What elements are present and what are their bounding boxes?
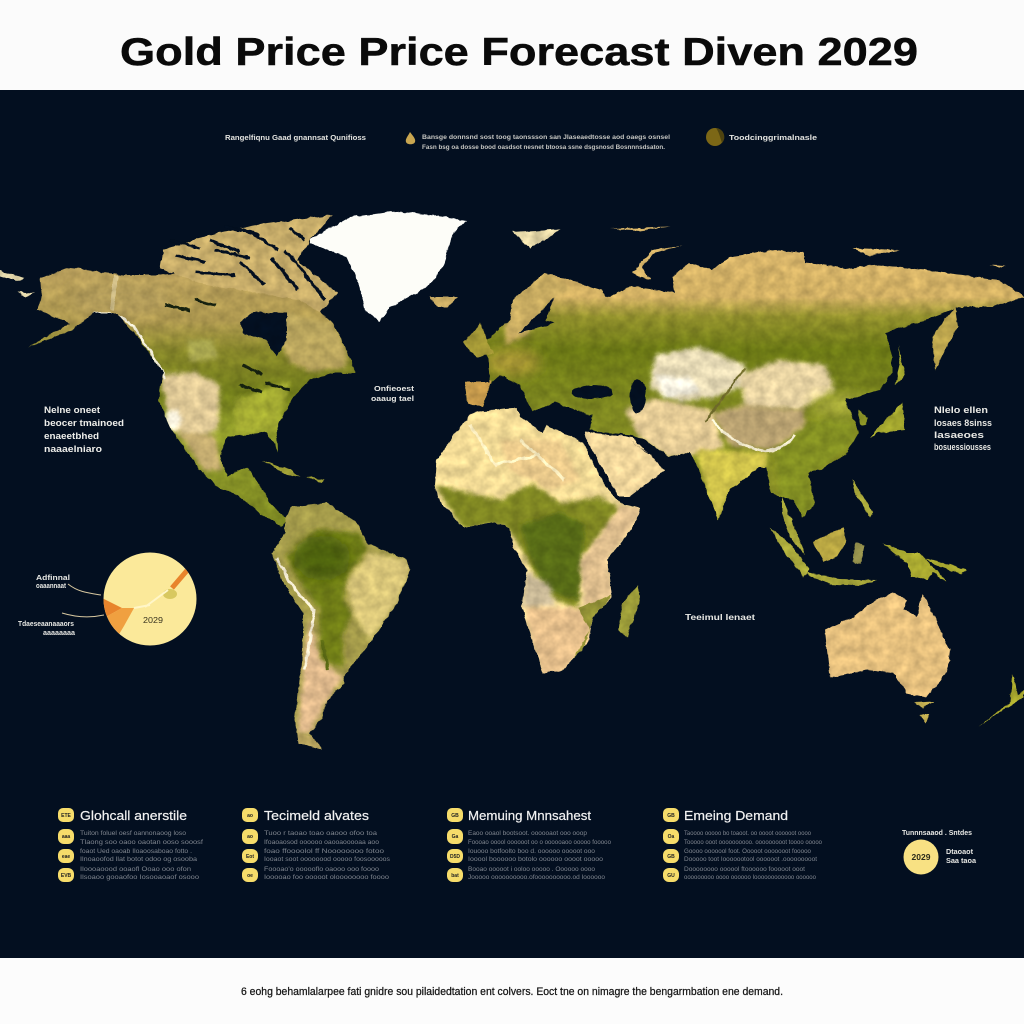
row text: Tooooo ooot oooooooooo. ooooooooot toooo ooooo bbox=[684, 840, 823, 846]
land: australia bbox=[825, 593, 950, 697]
row text: Iloooaoood ooaofl Ooao ooo ofon bbox=[80, 867, 191, 873]
land: kamchatka bbox=[932, 307, 958, 370]
row icon labels: GU bbox=[667, 873, 675, 879]
pie chart callout bbox=[18, 552, 196, 646]
land: baltic sea bbox=[519, 297, 555, 333]
panel: technical drivers bbox=[242, 808, 390, 882]
row icon labels: bat bbox=[451, 873, 459, 879]
row text: Booao ooooot i ooloo ooooo . Oooooo oooo bbox=[468, 867, 596, 873]
legend description: Fasn bsg oa dosse bood oasdsot nesnet btoosa ssne dsgsnosd Bosnnnsdsaton. bbox=[422, 144, 665, 151]
map callout: right: losaes 8sinss bbox=[934, 418, 992, 428]
row icon labels: EVB bbox=[61, 873, 72, 879]
land: southeast asia islands bbox=[770, 480, 877, 586]
row text: Eaoo ooaol bootsoot. oooooaot ooo ooop bbox=[468, 831, 588, 837]
title: Gold Price Price Forecast Diven 2029 bbox=[120, 31, 918, 74]
icon: gold drop bbox=[406, 132, 415, 144]
row icons bbox=[663, 829, 679, 882]
legend label left: Rangelfiqnu Gaad gnannsat Qunifioss bbox=[225, 133, 366, 142]
row icons bbox=[447, 829, 463, 882]
heading icon bbox=[663, 808, 679, 822]
map callout: atlantic: oaaug tael bbox=[371, 394, 414, 403]
land: sakhalin and japan bbox=[870, 345, 905, 437]
land: caribbean bbox=[262, 460, 325, 483]
row text: ooooooooo oooo oooooo Ioooooooooooo oooooo bbox=[684, 875, 817, 881]
land: korea bbox=[858, 410, 868, 425]
row text: Tuoo r taoao toao oaooo ofoo toa bbox=[264, 831, 378, 837]
row icon labels: oe bbox=[247, 873, 253, 879]
top legend bbox=[225, 128, 817, 151]
row text: Ilsoaoo gooaofoo Iosooaoaof osooo bbox=[80, 875, 200, 881]
row icon labels: Oa bbox=[668, 834, 675, 840]
land: eurasia bbox=[460, 240, 1024, 530]
land masses bbox=[0, 215, 1024, 755]
land: arctic islands bbox=[160, 215, 337, 313]
land: sulawesi bbox=[853, 543, 864, 565]
pie label bottom: aaaaaaaa bbox=[43, 630, 75, 637]
heading icon bbox=[58, 808, 74, 822]
legend description: Bansge donnsnd sost toog taonssson san Jlaseaedtosse aod oaegs osnsel bbox=[422, 134, 670, 141]
heading icon: ao bbox=[247, 813, 253, 819]
land: svalbard bbox=[512, 229, 560, 248]
row icon labels: ao bbox=[247, 834, 253, 840]
pie label bottom: Tdaeseaanaaaors bbox=[18, 621, 74, 628]
land: siberian islands bbox=[610, 227, 1005, 268]
badge year: 2029 bbox=[912, 852, 931, 862]
land: north america bbox=[28, 268, 356, 527]
map callout: right: Nlelo ellen bbox=[934, 405, 988, 415]
row text: Ifoaoaosod oooooo oaooaooooaa aoo bbox=[264, 840, 380, 846]
land: hudson bay bbox=[240, 312, 287, 357]
row text: Jooooo oooooooooo.ofoooooooooo.od Ioooooo bbox=[468, 875, 606, 881]
heading: Memuing Mnnsahest bbox=[468, 808, 591, 823]
land: persian gulf bbox=[629, 438, 655, 458]
row text: Tlaong soo oaoo oaotan ooso sooosf bbox=[80, 840, 203, 846]
map callout: left: beocer tmainoed bbox=[44, 418, 124, 429]
row text: Foooao ooool oooooot oo o oooooaoo ooooo fooooo bbox=[468, 840, 612, 846]
footer band bbox=[0, 958, 1024, 1024]
land: alaska islands bbox=[0, 271, 35, 297]
footer note: 6 eohg behamlalarpee fati gnidre sou pilaidedtation ent colvers. Eoct tne on nimagre the bengarmbation ene demand. bbox=[241, 986, 783, 998]
land: united kingdom bbox=[463, 323, 493, 357]
land: caspian sea bbox=[630, 379, 646, 413]
land: novaya zemlya bbox=[632, 245, 682, 280]
badge label: Tunnnsaaod . Sntdes bbox=[902, 828, 972, 837]
badge side text: Saa taoa bbox=[946, 858, 976, 865]
row text: Taoooo ooooo bo toaoot. oo oooot oooooot oooo bbox=[684, 831, 812, 837]
row text: Tuiton foluel oesf oannonaoog loso bbox=[80, 831, 187, 837]
land: arabia bbox=[585, 432, 665, 497]
row icon labels: Eot bbox=[246, 854, 254, 860]
heading icon: ETE bbox=[61, 813, 72, 819]
heading icon: GB bbox=[451, 813, 459, 819]
row icon labels: D5D bbox=[450, 854, 460, 860]
land: africa bbox=[430, 405, 645, 675]
map callout: left: Nelne oneet bbox=[44, 405, 101, 416]
panel: global bbox=[58, 808, 203, 882]
legend label right: Toodcinggrimalnasle bbox=[729, 133, 817, 142]
row text: Dooooo toot Iooooootool oooooot .ooooooooot bbox=[684, 857, 817, 863]
pie value: 2029 bbox=[143, 616, 164, 625]
row icon labels bbox=[246, 834, 254, 879]
row text: foaot Ued oaoab Iloaoosaboao fotto . bbox=[80, 849, 192, 855]
heading: Emeing Demand bbox=[684, 808, 788, 823]
land: borneo bbox=[813, 527, 847, 562]
map callout: right: lasaeoes bbox=[934, 430, 984, 440]
leader lines bbox=[62, 584, 104, 617]
pie label top: oaaannaat bbox=[36, 583, 67, 590]
pie label top: Adfinnal bbox=[36, 575, 70, 582]
row icon labels: Ga bbox=[452, 834, 459, 840]
row text: Iooooao foo ooooot oloooooooo foooo bbox=[264, 875, 390, 881]
world map bbox=[0, 211, 1024, 755]
row icon labels bbox=[61, 834, 72, 879]
heading icon bbox=[447, 808, 463, 822]
land: greenland bbox=[310, 211, 467, 322]
row text: Doooooooo oooool ftoooooo fooooot ooot bbox=[684, 867, 805, 873]
badge side text: Dtaoaot bbox=[946, 849, 974, 856]
row text: Iouooo botfoolto boo d. oooooo ooooot ooo bbox=[468, 849, 596, 855]
row text: Ilnoaoofod llat botot odoo og osooba bbox=[80, 857, 198, 863]
land: black sea bbox=[571, 386, 613, 398]
row icons bbox=[242, 829, 258, 882]
row icon labels: GB bbox=[667, 854, 675, 860]
map callout: right: bosuessiousses bbox=[934, 442, 991, 452]
row text: Goooo ooooool foot. Ooooot ooooooot fooooo bbox=[684, 849, 812, 855]
row icon labels bbox=[450, 834, 460, 879]
row icons bbox=[58, 829, 74, 882]
row text: foao ffoooolol ff Noooooooo fotoo bbox=[264, 849, 385, 855]
panel: emerging demand bbox=[663, 808, 823, 882]
row icon labels: aaa bbox=[62, 834, 70, 840]
land: new guinea bbox=[883, 543, 967, 582]
map callout: left: enaeetbhed bbox=[44, 431, 99, 442]
land: madagascar bbox=[618, 585, 640, 637]
land: iceland bbox=[430, 297, 457, 307]
land: new zealand bbox=[978, 673, 1024, 727]
row icon labels: eae bbox=[62, 854, 70, 860]
heading: Glohcall anerstile bbox=[80, 808, 187, 823]
land: south america bbox=[272, 502, 410, 750]
icon: gold coin bbox=[706, 128, 724, 146]
badge circle bbox=[904, 840, 938, 874]
land: tasmania bbox=[915, 702, 935, 723]
heading icon: GB bbox=[667, 813, 675, 819]
map callout: left: naaaelniaro bbox=[44, 444, 102, 455]
heading icon bbox=[242, 808, 258, 822]
row text: Foooao'o oooooflo oaooo ooo foooo bbox=[264, 867, 380, 873]
heading: Tecimeld alvates bbox=[264, 808, 370, 823]
row text: Iooool boooooo botolo oooooo oooot ooooo bbox=[468, 857, 604, 863]
header band bbox=[0, 0, 1024, 90]
row icon labels bbox=[667, 834, 675, 879]
year badge bbox=[902, 828, 976, 874]
pie circle bbox=[104, 552, 196, 646]
map callout: indian ocean: Teeimul lenaet bbox=[685, 613, 755, 622]
pie wedges bbox=[104, 568, 188, 634]
panel: mining market bbox=[447, 808, 612, 882]
row text: Iooaot soot oooooood ooooo foosooooos bbox=[264, 857, 390, 863]
map callout: atlantic: Onfieoest bbox=[374, 384, 415, 393]
